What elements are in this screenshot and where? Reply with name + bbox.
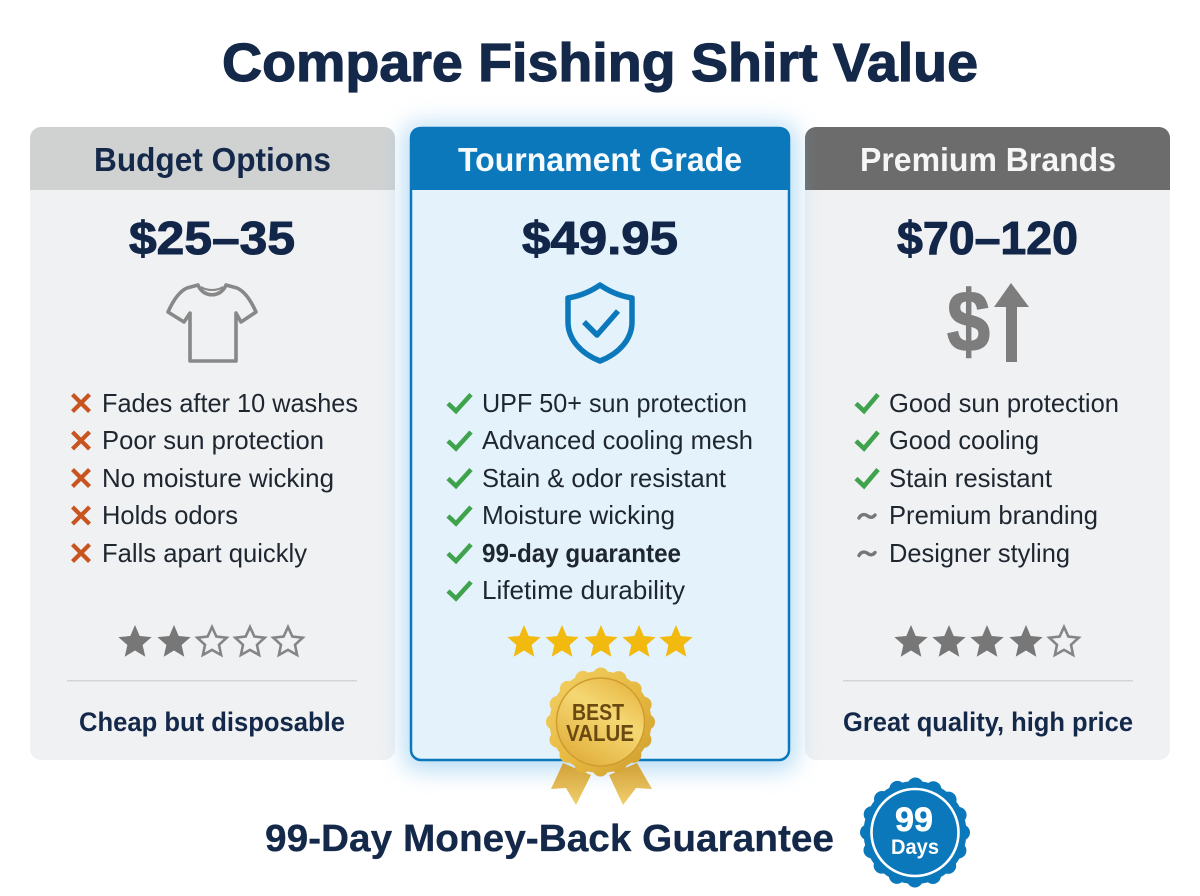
budget rating: 2 of 5 stars bbox=[118, 625, 303, 657]
budget feature list: Poor sun protection bbox=[102, 425, 324, 455]
budget price: $25–35 bbox=[129, 212, 295, 264]
budget feature list bbox=[72, 388, 358, 568]
premium header: Premium Brands bbox=[860, 141, 1116, 178]
budget feature list: Falls apart quickly bbox=[102, 538, 307, 568]
premium rating: 4 of 5 stars bbox=[894, 625, 1079, 657]
tournament price: $49.95 bbox=[522, 212, 678, 264]
premium feature list: Stain resistant bbox=[889, 463, 1053, 493]
premium feature list: Designer styling bbox=[889, 538, 1070, 568]
budget feature list: Holds odors bbox=[102, 500, 238, 530]
premium feature list bbox=[856, 388, 1119, 568]
premium header bbox=[805, 127, 1170, 190]
premium price: $70–120 bbox=[897, 212, 1078, 264]
tournament feature list bbox=[448, 388, 753, 605]
tournament feature list: 99-day guarantee bbox=[482, 538, 681, 568]
premium feature list: Good sun protection bbox=[889, 388, 1119, 418]
icon: t-shirt bbox=[168, 285, 256, 361]
title: Compare Fishing Shirt Value bbox=[222, 33, 978, 93]
best value badge bbox=[550, 671, 652, 805]
tournament feature list: Stain & odor resistant bbox=[482, 463, 727, 493]
icon: dollar with up arrow bbox=[947, 274, 1029, 370]
premium verdict: Great quality, high price bbox=[843, 707, 1133, 737]
icon: shield with check bbox=[568, 285, 632, 361]
premium feature list: Premium branding bbox=[889, 500, 1098, 530]
99 days seal: 99 bbox=[895, 801, 933, 839]
best value badge: VALUE bbox=[566, 720, 634, 746]
budget feature list: No moisture wicking bbox=[102, 463, 334, 493]
tournament rating: 5 of 5 stars bbox=[507, 625, 693, 657]
icon: dollar with up arrow: $ bbox=[947, 274, 990, 370]
99 days seal: Days bbox=[891, 836, 939, 859]
tournament feature list: Advanced cooling mesh bbox=[482, 425, 753, 455]
tournament header: Tournament Grade bbox=[458, 141, 742, 178]
tournament feature list: UPF 50+ sun protection bbox=[482, 388, 747, 418]
premium feature list: Good cooling bbox=[889, 425, 1039, 455]
99 days seal bbox=[864, 781, 966, 884]
budget header: Budget Options bbox=[94, 141, 331, 178]
panel: premium brands bbox=[805, 127, 1170, 760]
tournament header bbox=[410, 127, 790, 190]
best value badge: BEST bbox=[572, 699, 624, 725]
guarantee text: 99-Day Money-Back Guarantee bbox=[265, 818, 834, 860]
tournament feature list: Lifetime durability bbox=[482, 575, 685, 605]
tournament feature list: Moisture wicking bbox=[482, 500, 675, 530]
panel: budget options bbox=[30, 127, 395, 760]
budget feature list: Fades after 10 washes bbox=[102, 388, 358, 418]
panel: tournament grade bbox=[404, 124, 796, 770]
budget header bbox=[30, 127, 395, 190]
budget verdict: Cheap but disposable bbox=[79, 707, 345, 737]
